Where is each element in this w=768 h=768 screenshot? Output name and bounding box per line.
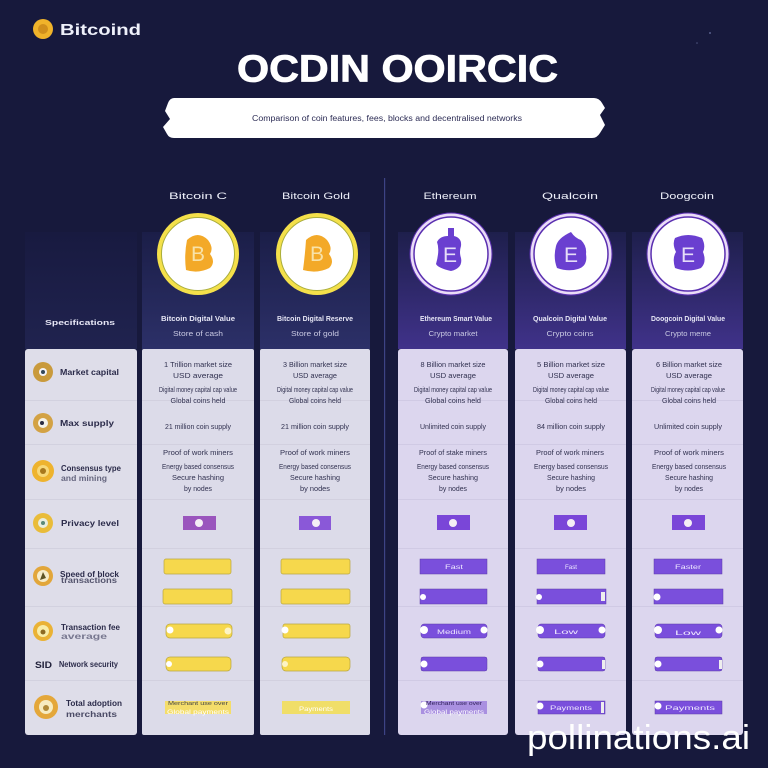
button [299, 516, 331, 530]
button [183, 516, 216, 530]
panel: row labels: and mining [61, 474, 107, 483]
icon: fees [33, 621, 53, 641]
icon: privacy [33, 513, 53, 533]
panel: coin column 4: Fast [565, 564, 577, 571]
panel: coin column 4: 84 million coin supply [537, 422, 605, 431]
panel: coin column 2: 3 Billion market size [283, 360, 347, 369]
panel: coin column 4: Energy based consensus [534, 462, 608, 471]
panel: coin column 3: Global coins held [425, 396, 481, 405]
logo: Bitcoind [60, 22, 141, 39]
panel: coin column 5: USD average [666, 371, 712, 380]
centre divider [384, 178, 385, 735]
icon: SID: SID [35, 660, 53, 670]
panel: coin column 3: Merchant use over [426, 701, 482, 707]
panel: coin column 2: USD average [293, 371, 337, 380]
panel: coin column 1: Global payments [167, 710, 229, 716]
panel: coin column 5: Crypto meme [665, 331, 711, 338]
panel: coin column 4: Qualcoin Digital Value [533, 314, 607, 323]
icon: purple coin: E [681, 244, 695, 267]
panel: coin column 2: Secure hashing [290, 473, 340, 482]
panel: coin column 3: 8 Billion market size [420, 360, 486, 369]
icon: speed [33, 566, 53, 586]
panel: coin column 3: Global payments [424, 710, 484, 716]
subtitle banner [163, 98, 605, 138]
button [437, 515, 470, 530]
panel: coin column 5: Energy based consensus [652, 462, 726, 471]
panel: coin column 5: Global coins held [662, 396, 716, 405]
panel: coin column 5: Doogcoin [660, 191, 714, 202]
panel: coin column 5: Payments [665, 705, 716, 712]
panel: coin column 2: by nodes [300, 484, 330, 493]
panel: row labels: Consensus type [61, 464, 122, 473]
panel: coin column 2: Bitcoin Digital Reserve [277, 314, 353, 323]
icon: purple coin [410, 213, 492, 295]
title: OCDIN OOIRCIC [237, 48, 558, 90]
panel: coin column 2: Bitcoin Gold [282, 191, 350, 202]
panel: row labels: Specifications [45, 318, 115, 327]
panel: row labels: Privacy level [61, 519, 119, 528]
panel: row labels: Market capital [60, 368, 119, 377]
panel: coin column 4: by nodes [556, 484, 586, 493]
icon: consensus [32, 460, 54, 482]
panel: coin column 1: by nodes [184, 484, 212, 493]
panel: coin column 4: Digital money capital cap value [533, 385, 609, 394]
panel: coin column 5: 6 Billion market size [656, 360, 722, 369]
panel: coin column 5: Secure hashing [665, 473, 713, 482]
panel: coin column 3: USD average [430, 371, 476, 380]
panel: coin column 3: Secure hashing [428, 473, 478, 482]
panel: coin column 4: Crypto coins [546, 331, 594, 338]
panel: row labels: transactions [61, 576, 118, 585]
panel: coin column 2: 21 million coin supply [281, 422, 349, 431]
watermark: pollinations.ai [527, 719, 750, 757]
subtitle banner: Comparison of coin features, fees, blocks and decentralised networks [252, 114, 522, 123]
panel: coin column 5 [632, 191, 743, 735]
panel: coin column 1: 21 million coin supply [165, 422, 231, 431]
icon: adoption [34, 695, 58, 719]
logo [33, 19, 141, 39]
panel: coin column 4: Global coins held [545, 396, 597, 405]
panel: coin column 4: Secure hashing [547, 473, 595, 482]
panel: row labels: Transaction fee [61, 623, 121, 632]
panel: coin column 1: 1 Trillion market size [164, 360, 232, 369]
panel: coin column 3: Ethereum [424, 191, 477, 202]
panel: coin column 5: Proof of work miners [654, 448, 724, 457]
panel: coin column 4: Proof of work miners [536, 448, 604, 457]
icon: market cap [33, 362, 53, 382]
panel: row labels: average [61, 632, 108, 641]
panel: coin column 3: Proof of stake miners [419, 448, 487, 457]
icon: purple coin: E [564, 244, 578, 267]
panel: row labels: Speed of block [60, 570, 120, 579]
panel: coin column 3: Medium [437, 629, 471, 636]
panel: coin column 2: Digital money capital cap value [277, 385, 353, 394]
panel: coin column 4: Payments [550, 705, 593, 712]
panel: row labels: Max supply [60, 419, 115, 428]
panel: coin column 1: Bitcoin C [169, 191, 227, 202]
panel: row labels: Network security [59, 660, 119, 669]
panel: coin column 4: USD average [548, 371, 594, 380]
panel: coin column 1: Bitcoin Digital Value [161, 314, 235, 323]
panel: coin column 5: Faster [675, 564, 702, 571]
panel: coin column 3: Unlimited coin supply [420, 422, 486, 431]
panel: coin column 4: Low [554, 629, 579, 636]
panel: coin column 3: by nodes [439, 484, 467, 493]
panel: coin column 1: Store of cash [173, 331, 223, 338]
panel: coin column 3: Ethereum Smart Value [420, 314, 492, 323]
panel: coin column 3: Crypto market [428, 331, 478, 338]
panel: coin column 2: Energy based consensus [279, 462, 351, 471]
icon: purple coin [530, 213, 612, 295]
panel: row labels: merchants [66, 710, 118, 719]
panel: coin column 1: Digital money capital cap value [159, 385, 237, 394]
panel: coin column 2: Store of gold [291, 331, 339, 338]
icon: purple coin [647, 213, 729, 295]
panel: coin column 5: Digital money capital cap value [651, 385, 725, 394]
panel: coin column 5: Low [675, 630, 702, 637]
panel: coin column 4 [515, 191, 626, 735]
panel: coin column 1: USD average [173, 371, 223, 380]
panel: coin column 4: 5 Billion market size [537, 360, 605, 369]
icon: gold coin [157, 213, 239, 295]
button [554, 515, 587, 530]
panel: coin column 5: Doogcoin Digital Value [651, 314, 725, 323]
panel: coin column 1: Global coins held [170, 396, 226, 405]
icon: gold coin [276, 213, 358, 295]
panel: coin column 1: Proof of work miners [163, 448, 233, 457]
icon: purple coin: E [443, 244, 457, 267]
panel: coin column 1: Merchant use over [168, 701, 228, 707]
panel: coin column 3: Fast [445, 564, 463, 571]
panel: coin column 3 [398, 191, 508, 735]
panel: row labels [25, 232, 137, 735]
panel: coin column 5: by nodes [675, 484, 703, 493]
button [672, 515, 705, 530]
panel: coin column 1 [142, 191, 254, 735]
panel: coin column 2: Payments [299, 707, 333, 713]
icon: supply [33, 413, 53, 433]
panel: coin column 4: Qualcoin [542, 191, 598, 202]
panel: coin column 2 [260, 191, 370, 735]
panel: coin column 5: Unlimited coin supply [654, 422, 722, 431]
icon: gold coin: B [191, 243, 205, 266]
panel: coin column 1: Energy based consensus [162, 462, 234, 471]
panel: coin column 3: Digital money capital cap value [414, 385, 492, 394]
panel: coin column 2: Global coins held [289, 396, 341, 405]
panel: coin column 1: Secure hashing [172, 473, 224, 482]
panel: row labels: Total adoption [66, 699, 122, 708]
icon: gold coin: B [310, 243, 324, 266]
panel: coin column 2: Proof of work miners [280, 448, 350, 457]
panel: coin column 3: Energy based consensus [417, 462, 489, 471]
